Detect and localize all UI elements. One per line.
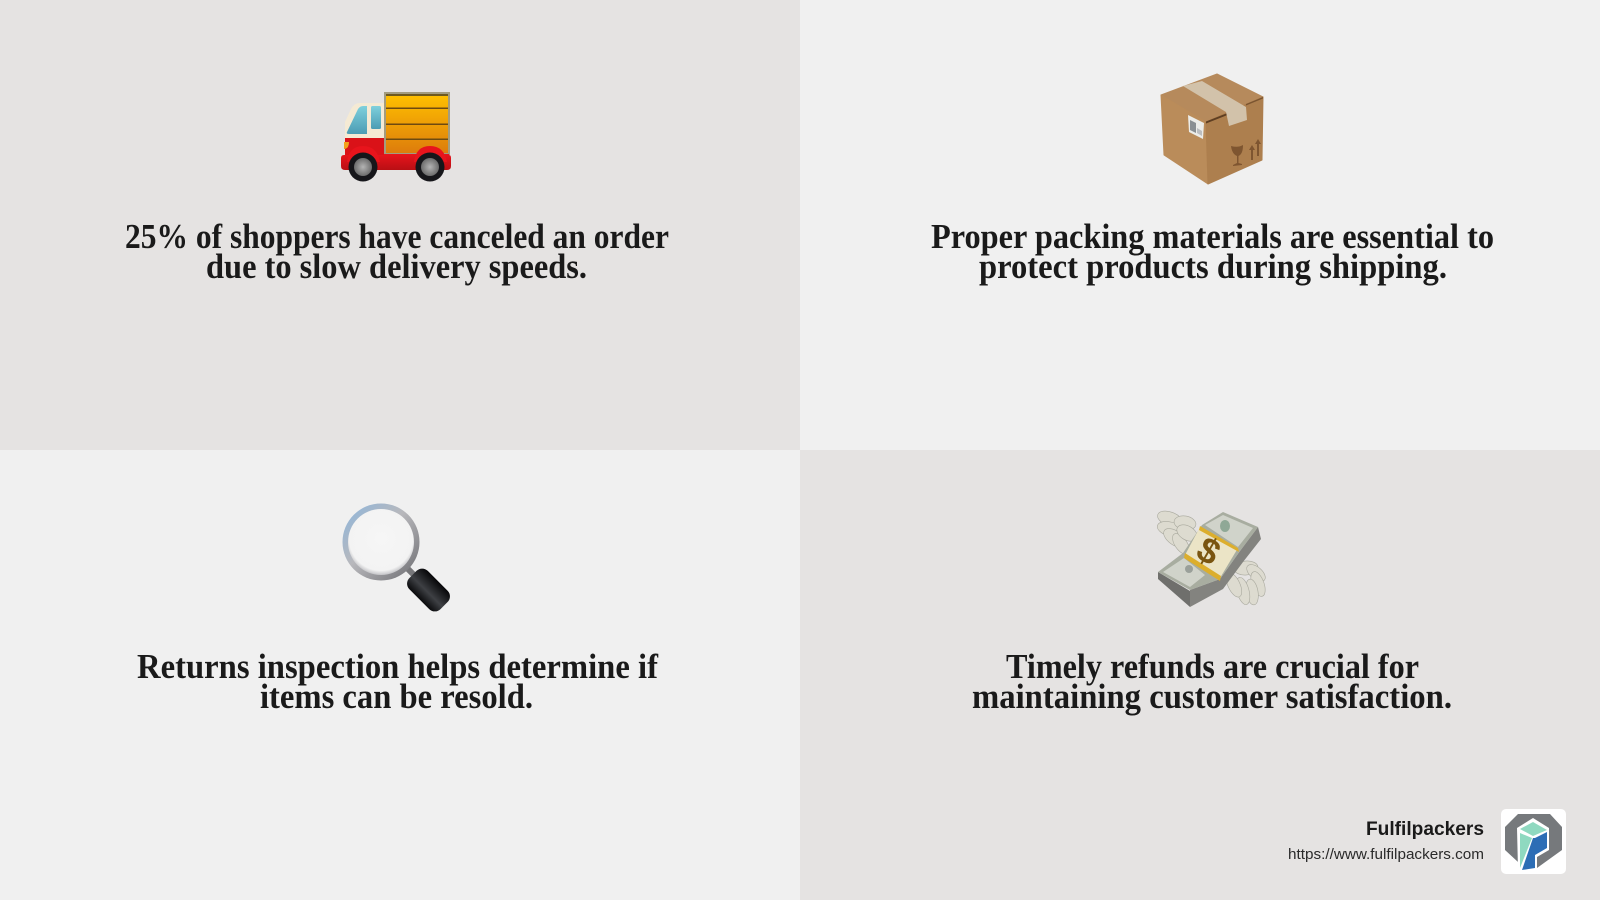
heading: slow delivery: 25% of shoppers have canceled an order [125,217,669,256]
heading: packing materials: Proper packing materials are essential to [931,217,1494,256]
panel: packing materials [800,0,1600,450]
panel: timely refunds [800,450,1600,900]
heading: packing materials [931,217,1494,286]
brand name: Fulfilpackers [1366,819,1484,840]
icon: delivery truck [341,92,451,182]
icon: money with wings: $ [1190,528,1228,573]
heading: returns inspection: items can be resold. [260,677,533,716]
brand footer [1288,809,1566,874]
heading: slow delivery: due to slow delivery speeds. [206,247,587,286]
heading: timely refunds: maintaining customer satisfaction. [972,677,1452,716]
heading: returns inspection: Returns inspection helps determine if [137,647,658,686]
logo [1501,809,1566,874]
heading: timely refunds [972,647,1452,716]
heading: slow delivery [125,217,669,286]
heading: packing materials: protect products during shipping. [979,247,1447,286]
icon: cardboard box [1161,74,1263,184]
panel: slow delivery [0,0,800,450]
icon: money with wings [1155,508,1268,607]
panel: returns inspection [0,450,800,900]
heading: timely refunds: Timely refunds are crucial for [1006,647,1419,686]
heading: returns inspection [137,647,658,716]
brand url: https://www.fulfilpackers.com [1288,846,1484,863]
icon: magnifying glass [342,504,453,615]
